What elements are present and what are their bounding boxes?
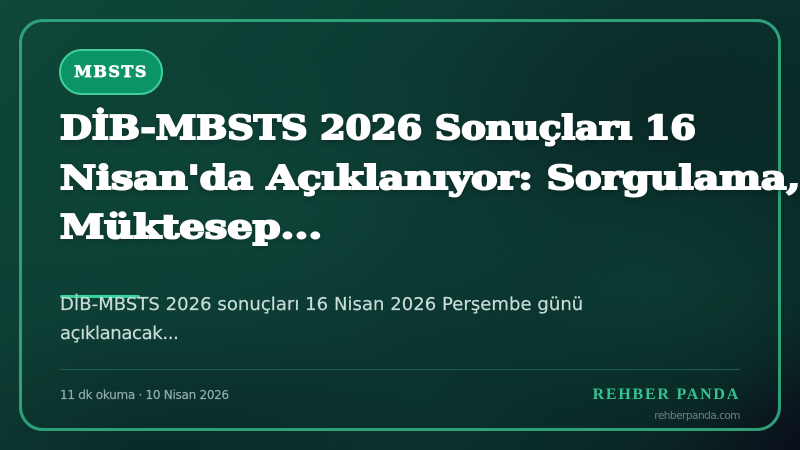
accent rule [60, 295, 140, 298]
website url: rehberpanda.com [654, 410, 740, 422]
description text [60, 294, 583, 344]
badge: MBSTS [59, 49, 163, 95]
brand name: REHBER PANDA [593, 386, 740, 403]
title: Nisan'da Açıklanıyor: Sorgulama, [60, 158, 800, 196]
title: DİB-MBSTS 2026 Sonuçları 16 [60, 108, 696, 147]
description text: açıklanacak... [60, 323, 178, 344]
badge: MBSTS: MBSTS [74, 62, 148, 81]
title: Müktesep... [60, 207, 322, 246]
footer divider [60, 369, 740, 370]
description text: DİB-MBSTS 2026 sonuçları 16 Nisan 2026 Perşembe günü [60, 294, 583, 315]
title [60, 107, 800, 248]
reading time and date: 11 dk okuma · 10 Nisan 2026 [60, 388, 229, 402]
